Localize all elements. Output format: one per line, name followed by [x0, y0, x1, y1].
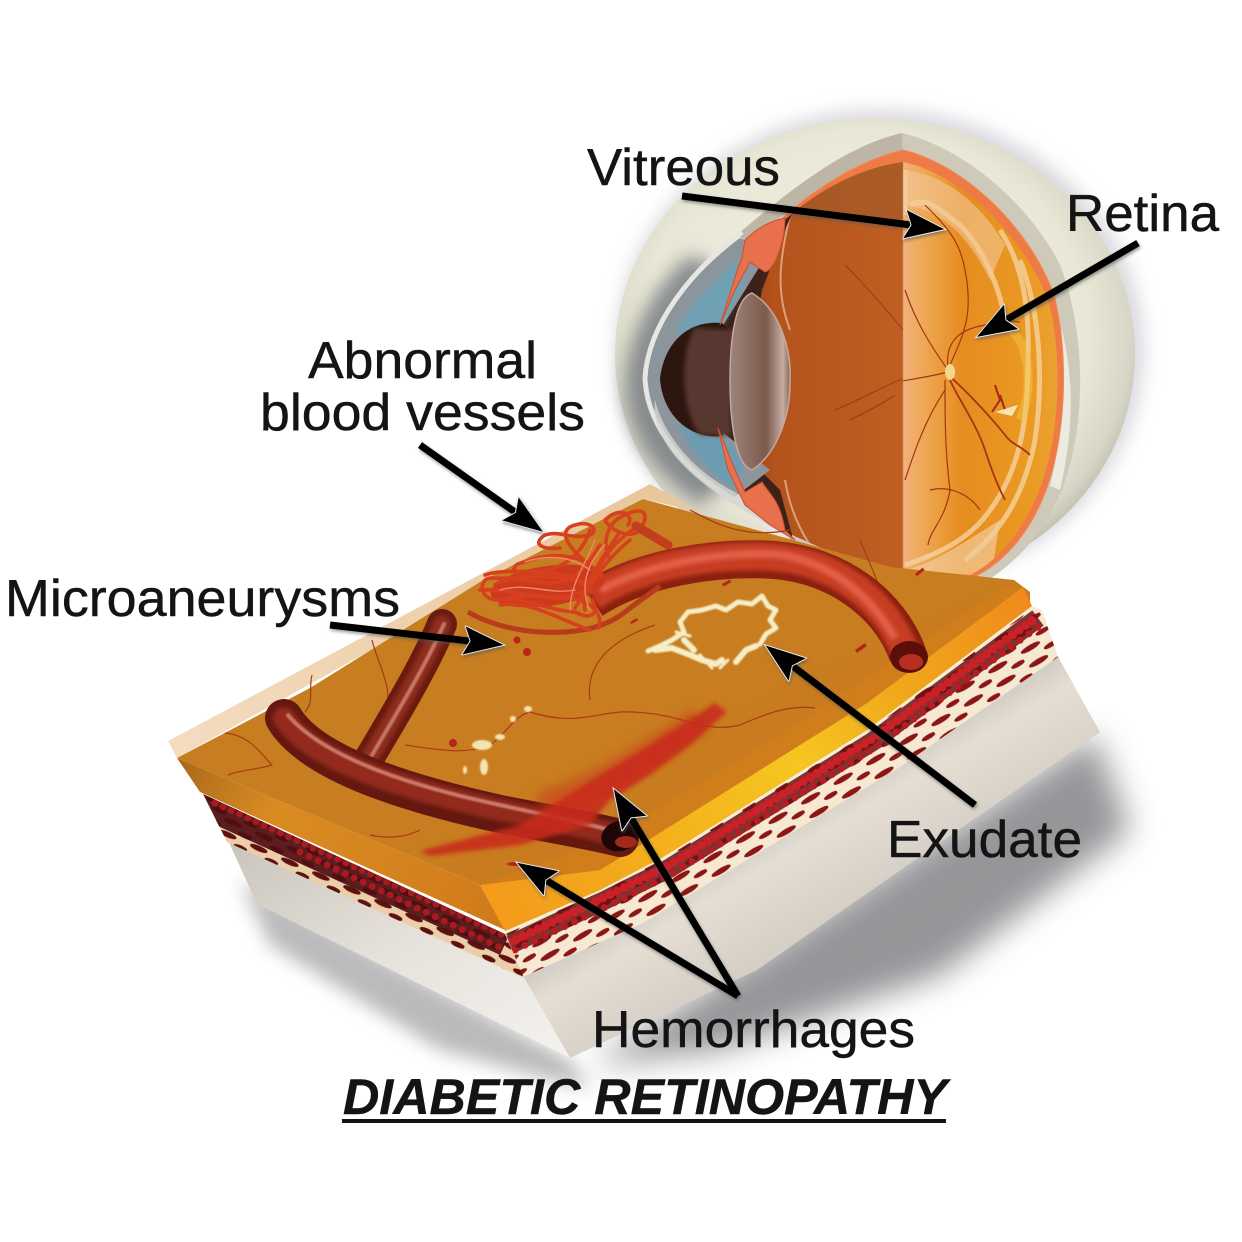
main artery tube	[592, 554, 908, 655]
beige base right face	[523, 655, 1100, 1058]
outer wall band	[740, 133, 1080, 582]
tissue block	[168, 484, 1130, 1090]
eye shadow	[616, 110, 1144, 590]
hemorrhage flame	[420, 703, 727, 856]
beige base left face	[227, 838, 570, 1058]
label: Abnormal blood vessels: blood vessels	[260, 384, 585, 442]
orange left face	[177, 758, 505, 930]
red blood cell band right	[509, 616, 1042, 950]
arrow: hemorrhage dot	[539, 876, 738, 996]
label: Hemorrhages: Hemorrhages	[592, 1001, 915, 1059]
sclera	[615, 118, 1135, 590]
ciliary body top	[720, 218, 785, 325]
lesions on macula	[992, 385, 1005, 412]
eyeball cross-section	[615, 110, 1144, 590]
yellow band	[480, 587, 1032, 931]
cell layer right face	[505, 606, 1058, 977]
dark chamber behind lens	[718, 214, 792, 540]
retina half	[903, 162, 1058, 575]
arrow: exudate	[786, 661, 975, 805]
choroid orange line	[770, 150, 1064, 578]
retina optic disc	[945, 364, 955, 380]
inner section divider	[902, 150, 904, 570]
cornea	[645, 232, 793, 545]
retinal blood vessels	[903, 204, 1031, 546]
arrow: vitreous	[682, 196, 919, 226]
light back edge	[168, 484, 700, 758]
limbus grey feathering	[625, 255, 730, 505]
exudate small	[463, 706, 532, 775]
arrow: retina	[999, 243, 1138, 324]
speckled wall right	[1050, 330, 1071, 490]
darker orange band	[480, 587, 1023, 885]
arrow: abnormal blood vessels	[420, 445, 522, 517]
red mass	[488, 558, 608, 614]
abnormal vessel tangle	[480, 511, 645, 630]
lower vein	[284, 714, 620, 838]
block shadow right	[590, 735, 1130, 1065]
top retinal surface	[177, 499, 1030, 930]
lower vessel loop	[468, 586, 660, 632]
arrows	[330, 196, 1138, 996]
block shadow left	[240, 880, 590, 1090]
label: Vitreous: Vitreous	[587, 139, 780, 197]
exudate large	[648, 596, 776, 668]
cell layer left face	[203, 794, 524, 978]
vein cap	[598, 817, 642, 855]
red blood cell band left	[203, 803, 505, 950]
artery cap	[890, 641, 928, 673]
lens	[730, 293, 790, 470]
brown inner half	[760, 162, 903, 568]
iris	[648, 238, 770, 497]
left wall band shade	[736, 133, 903, 240]
arrow: hemorrhage flame	[627, 811, 738, 996]
label: Abnormal blood vessels: Abnormal	[308, 332, 537, 390]
label: Microaneurysms: Microaneurysms	[5, 570, 400, 628]
white membrane line	[505, 606, 1032, 932]
label: Retina: Retina	[1066, 185, 1219, 243]
branch vessel	[367, 624, 444, 762]
surface capillaries	[225, 510, 890, 837]
hemorrhage streak glow	[540, 720, 700, 805]
pupil	[660, 323, 745, 436]
title: DIABETIC RETINOPATHY	[343, 1069, 952, 1125]
retinal folds	[905, 170, 1040, 565]
arrow: microaneurysms	[330, 625, 478, 642]
side vessel stub	[636, 526, 668, 545]
label: Abnormal blood vessels	[260, 332, 585, 442]
label: Exudate: Exudate	[887, 811, 1082, 869]
ciliary body bottom	[718, 428, 795, 540]
micro dots	[449, 568, 925, 866]
